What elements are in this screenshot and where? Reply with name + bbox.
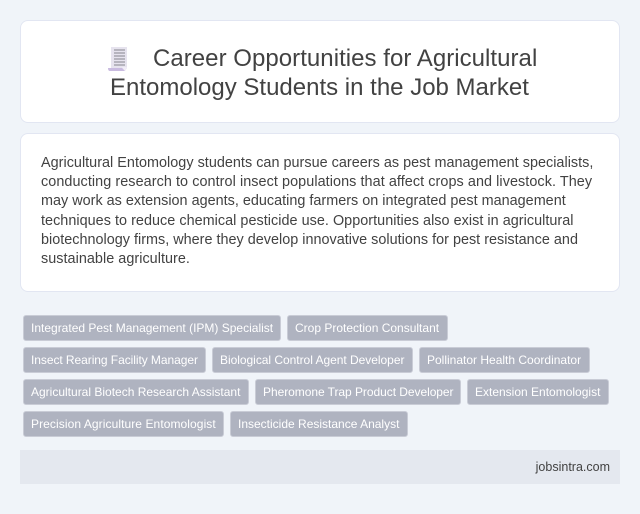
tag: Extension Entomologist: [475, 385, 600, 399]
tag list: [23, 315, 609, 437]
footer bar: [20, 450, 620, 484]
header panel: [20, 20, 620, 123]
tag: Insecticide Resistance Analyst: [238, 417, 399, 431]
description text: may work as extension agents, educating farmers on integrated pest management: [41, 193, 566, 209]
description text: biotechnology firms, where they develop innovative solutions for pest resistance and: [41, 232, 578, 248]
tag: Precision Agriculture Entomologist: [31, 417, 216, 431]
description panel: [20, 133, 620, 292]
title: [110, 45, 537, 101]
icon: document scroll: [108, 47, 127, 71]
description text: [41, 155, 593, 267]
tag: [255, 379, 461, 405]
tag: [23, 347, 206, 373]
description text: sustainable agriculture.: [41, 251, 190, 267]
tag: Pollinator Health Coordinator: [427, 353, 581, 367]
description text: techniques to reduce chemical pesticide use. Opportunities also exist in agricultural: [41, 213, 574, 229]
tag: [419, 347, 590, 373]
tag: Agricultural Biotech Research Assistant: [31, 385, 240, 399]
tag: Insect Rearing Facility Manager: [31, 353, 198, 367]
title: Entomology Students in the Job Market: [110, 74, 529, 101]
title: Career Opportunities for Agricultural: [153, 45, 537, 72]
description text: Agricultural Entomology students can pursue careers as pest management specialists,: [41, 155, 593, 171]
tag: [212, 347, 413, 373]
tag: Biological Control Agent Developer: [220, 353, 404, 367]
tag: [467, 379, 609, 405]
tag: [23, 411, 224, 437]
tag: [23, 379, 249, 405]
tag: [230, 411, 408, 437]
footer source text: jobsintra.com: [536, 460, 610, 474]
tag: [23, 315, 281, 341]
tag: Crop Protection Consultant: [295, 321, 439, 335]
description text: conducting research to control insect populations that affect crops and livestock. They: [41, 174, 592, 190]
tag: Pheromone Trap Product Developer: [263, 385, 454, 399]
tag: [287, 315, 448, 341]
tag: Integrated Pest Management (IPM) Specialist: [31, 321, 273, 335]
